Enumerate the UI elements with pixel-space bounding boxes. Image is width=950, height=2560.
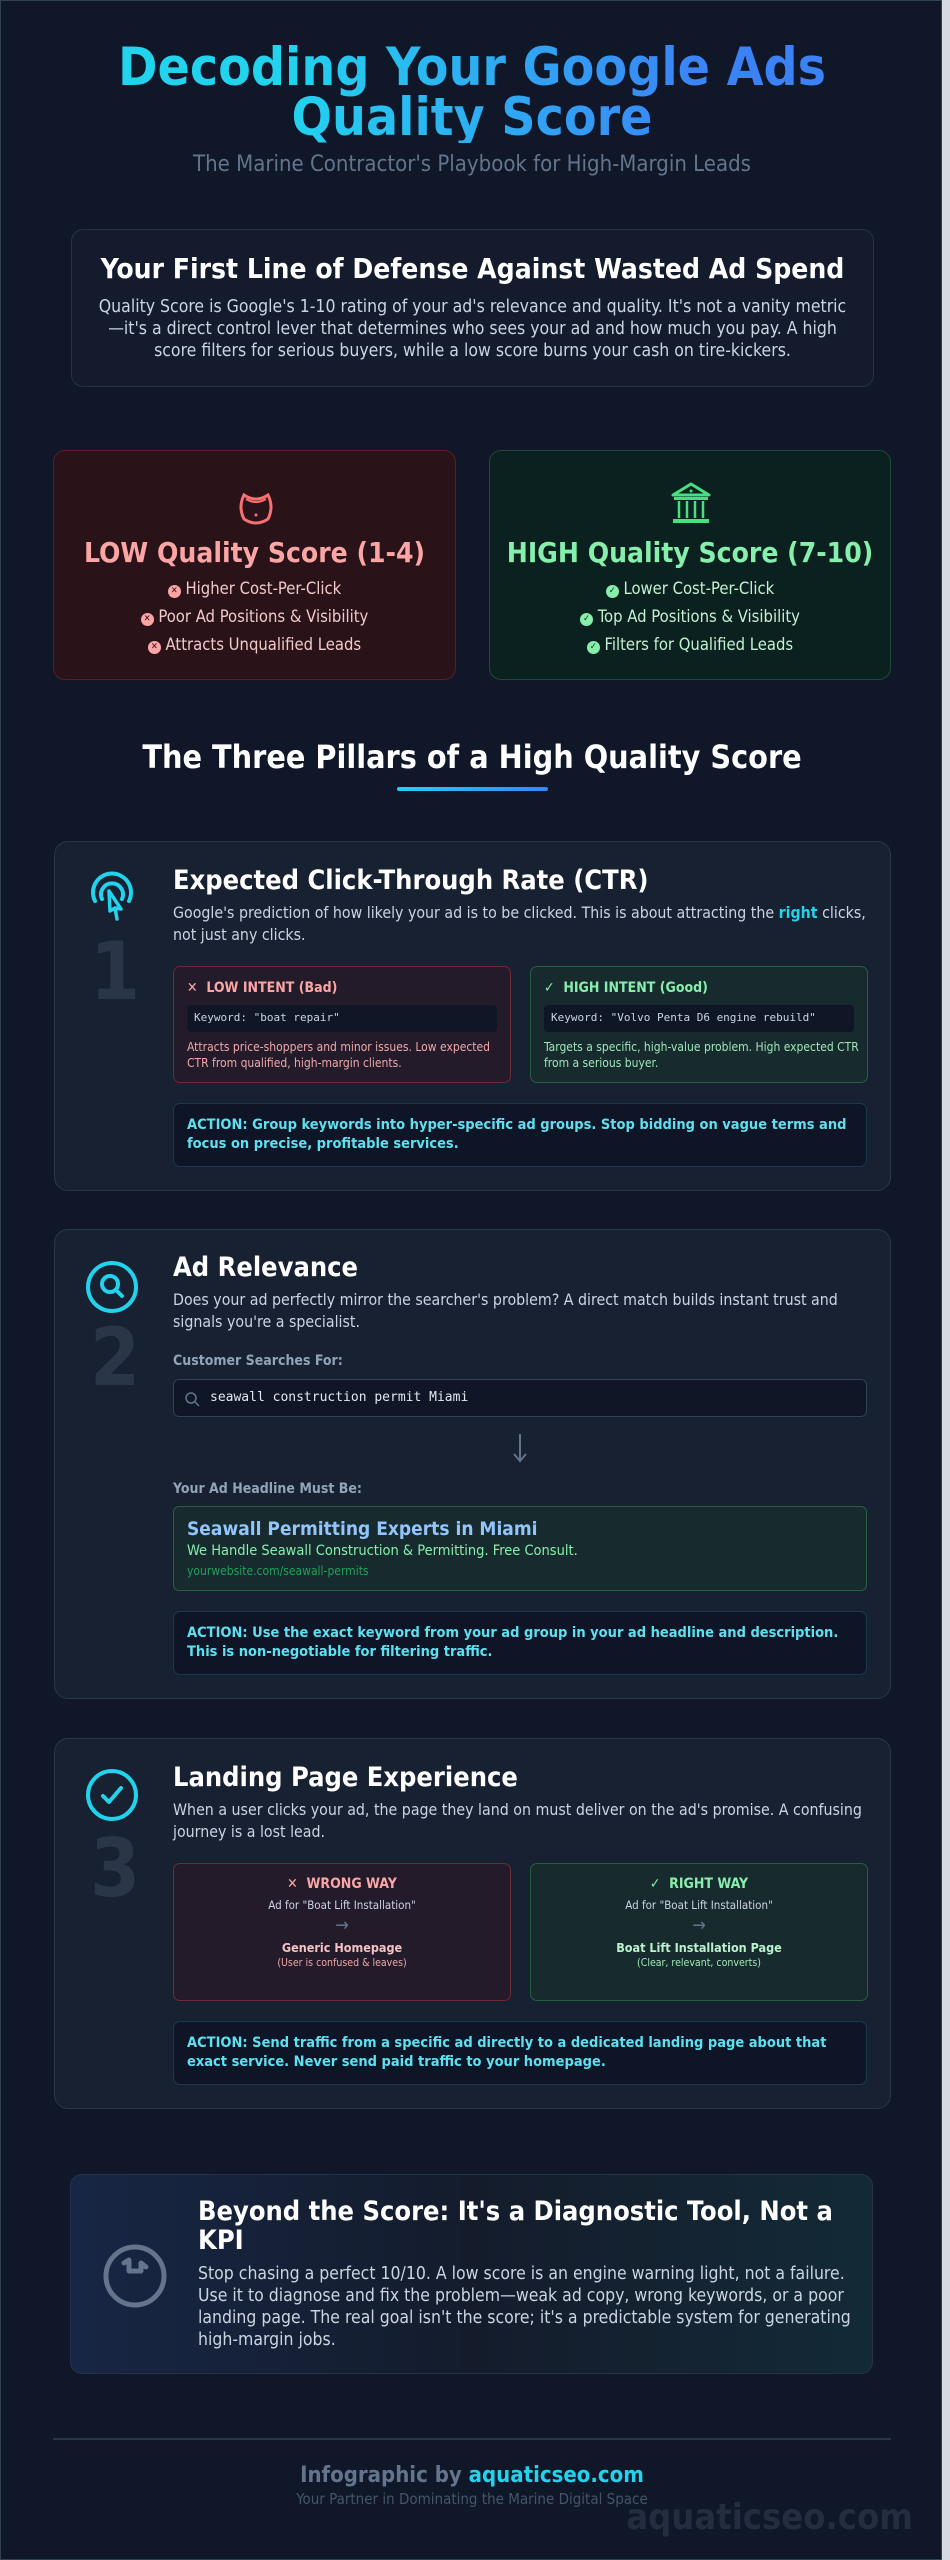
title: Decoding Your Google Ads (118, 37, 826, 98)
high title: HIGH Quality Score (7-10) (507, 536, 873, 569)
footer credit (296, 2463, 648, 2508)
action callout (173, 1103, 867, 1167)
ad description: We Handle Seawall Construction & Permitting. Free Consult. (187, 1543, 578, 1559)
high list: Top Ad Positions & Visibility (598, 607, 800, 626)
panel: pillar 1 CTR (54, 841, 891, 1191)
heading: Landing Page Experience (173, 1762, 518, 1793)
action callout: ACTION: Send traffic from a specific ad directly to a dedicated landing page about that exact service. Never send paid traffic to your homepage. (187, 2035, 826, 2070)
panel: pillar 2 ad relevance (54, 1229, 891, 1699)
title: Quality Score (291, 87, 652, 148)
closing text: Stop chasing a perfect 10/10. A low score is an engine warning light, not a failure. Use it to diagnose and fix the problem—weak ad copy, wrong keywords, or a poor landing page. The real goal isn't the score; it's a predictable system for generating high-margin jobs. (198, 2264, 851, 2350)
tagline: Your Partner in Dominating the Marine Digital Space (296, 2490, 648, 2508)
search query: seawall construction permit Miami (210, 1390, 468, 1405)
panel: pillar 3 landing page (54, 1738, 891, 2109)
intro panel (71, 229, 874, 387)
destination: Boat Lift Installation Page (616, 1940, 782, 1955)
intro text: Quality Score is Google's 1-10 rating of your ad's relevance and quality. It's not a vanity metric —it's a direct control lever that determines who sees your ad and how much you pay. A high score filters for serious buyers, while a low score burns your cash on tire-kickers. (99, 297, 846, 361)
panel: beyond the score (70, 2174, 873, 2374)
high list (580, 579, 800, 654)
action callout: ACTION: Group keywords into hyper-specific ad groups. Stop bidding on vague terms and focus on precise, profitable services. (187, 1117, 846, 1152)
footer divider (53, 2438, 891, 2440)
wrong way box (173, 1863, 511, 2001)
search box (173, 1379, 867, 1417)
arrow down (513, 1434, 527, 1462)
label: ad headline: Your Ad Headline Must Be: (173, 1481, 362, 1497)
description: Does your ad perfectly mirror the searcher's problem? A direct match builds instant trust and signals you're a specialist. (173, 1290, 838, 1331)
heading: Ad Relevance (173, 1252, 358, 1283)
low list: ✕ (151, 642, 158, 652)
high list: ✓ (590, 642, 597, 652)
icon: piggy bank (240, 492, 272, 524)
high list: ✓ (583, 614, 590, 624)
section heading: three pillars: The Three Pillars of a High Quality Score (142, 738, 802, 776)
low title: LOW Quality Score (1-4) (84, 536, 425, 569)
action callout (173, 1611, 867, 1675)
keyword (187, 1005, 497, 1032)
right way title: ✓ RIGHT WAY (650, 1876, 748, 1892)
keyword: Keyword: "boat repair" (194, 1011, 340, 1024)
low list: ✕ (171, 586, 178, 596)
keyword: Keyword: "Volvo Penta D6 engine rebuild" (551, 1011, 816, 1024)
number 1: 1 (90, 925, 140, 1018)
panel: high quality score (489, 450, 891, 680)
label: customer searches: Customer Searches For: (173, 1353, 343, 1369)
high list: ✓ (609, 586, 616, 596)
description: When a user clicks your ad, the page they land on must deliver on the ad's promise. A confusing journey is a lost lead. (173, 1800, 862, 1841)
ad url: yourwebsite.com/seawall-permits (187, 1564, 369, 1578)
icon: bank (672, 482, 711, 523)
ad text: Ad for "Boat Lift Installation" (625, 1898, 773, 1912)
high intent box (530, 966, 868, 1083)
keyword (544, 1005, 854, 1032)
arrow: → (692, 1915, 706, 1936)
low list: ✕ (144, 614, 151, 624)
low intent text: Attracts price-shoppers and minor issues. Low expected CTR from qualified, high-margin clients. (187, 1040, 490, 1070)
destination: Generic Homepage (282, 1940, 402, 1955)
high list: Lower Cost-Per-Click (623, 579, 774, 598)
heading: Expected Click-Through Rate (CTR) (173, 865, 649, 896)
low intent box (173, 966, 511, 1083)
description: Google's prediction of how likely your ad is to be clicked. This is about attracting the right clicks, not just any clicks. (173, 903, 866, 944)
low intent title: ✕ LOW INTENT (Bad) (187, 980, 337, 996)
result: (User is confused & leaves) (277, 1957, 407, 1969)
low list (141, 579, 368, 654)
icon: check circle (86, 1769, 138, 1821)
credit line: Infographic by aquaticseo.com (300, 2463, 644, 2488)
result: (Clear, relevant, converts) (637, 1957, 761, 1969)
arrow: → (335, 1915, 349, 1936)
icon: click (91, 872, 133, 921)
right way box (530, 1863, 868, 2001)
title (1, 43, 943, 143)
icon: search (86, 1261, 138, 1313)
high intent title: ✓ HIGH INTENT (Good) (544, 980, 708, 996)
wrong way title: ✕ WRONG WAY (287, 1876, 397, 1892)
watermark: aquaticseo.com (626, 2497, 913, 2538)
intro heading: Your First Line of Defense Against Wasted Ad Spend (101, 252, 844, 285)
low list: Poor Ad Positions & Visibility (158, 607, 368, 626)
closing heading: Beyond the Score: It's a Diagnostic Tool, Not a KPI (198, 2196, 833, 2256)
action callout: ACTION: Use the exact keyword from your ad group in your ad headline and description. This is non-negotiable for filtering traffic. (187, 1625, 838, 1660)
action callout (173, 2021, 867, 2085)
ad preview (173, 1506, 867, 1591)
icon: search glass (185, 1392, 200, 1406)
ad title: Seawall Permitting Experts in Miami (187, 1518, 538, 1540)
icon: gauge (104, 2244, 166, 2308)
low list: Attracts Unqualified Leads (166, 635, 361, 654)
heading underline (397, 787, 548, 791)
high list: Filters for Qualified Leads (605, 635, 793, 654)
high intent text: Targets a specific, high-value problem. High expected CTR from a serious buyer. (544, 1040, 859, 1070)
low list: Higher Cost-Per-Click (185, 579, 341, 598)
number 2: 2 (90, 1311, 140, 1404)
subtitle: The Marine Contractor's Playbook for High-Margin Leads (193, 152, 751, 177)
panel: low quality score (53, 450, 456, 680)
ad text: Ad for "Boat Lift Installation" (268, 1898, 416, 1912)
number 3: 3 (90, 1822, 140, 1915)
